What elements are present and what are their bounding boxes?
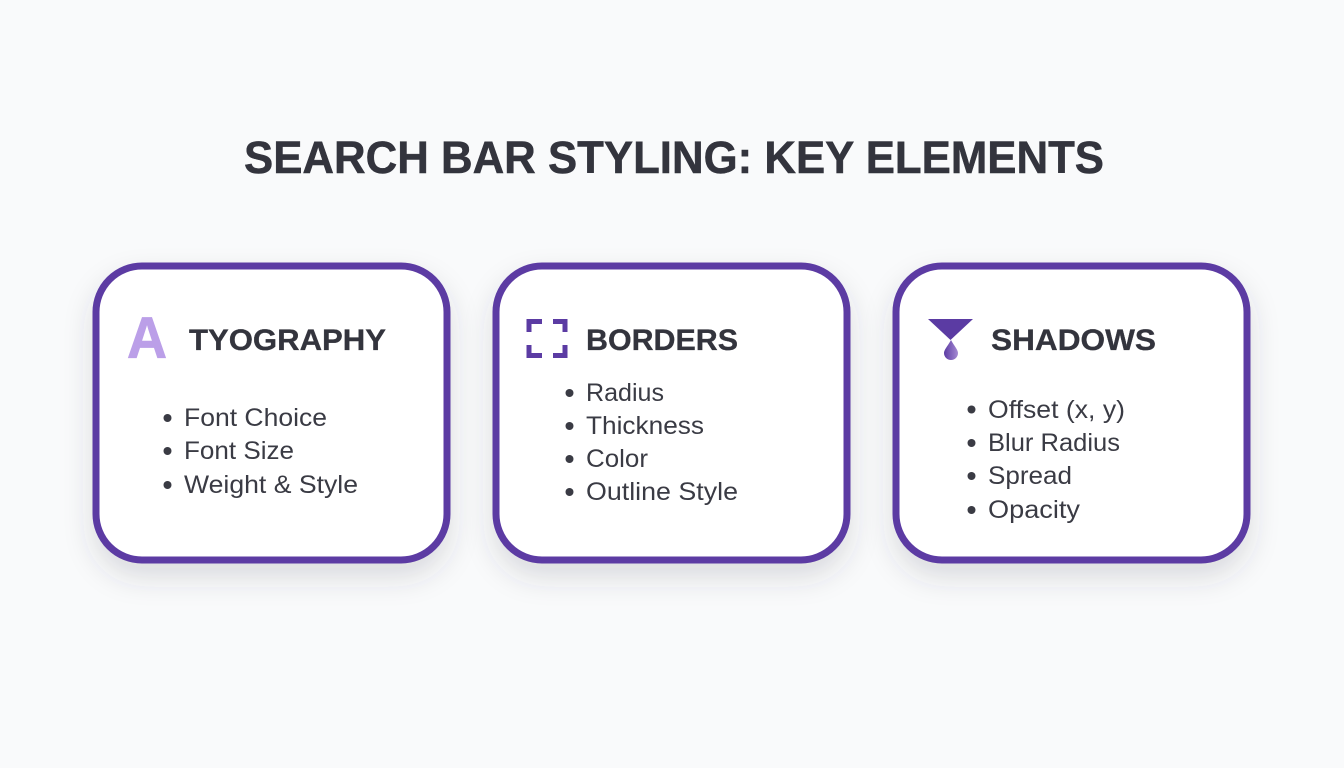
list: typography: [164, 404, 358, 499]
icon: funnel and drop: [928, 319, 973, 360]
panel: borders: [496, 266, 847, 560]
list: shadows: [968, 396, 1125, 524]
list: typography: Weight & Style: [184, 471, 358, 499]
list: typography: Font Choice: [184, 404, 327, 432]
icon: letter A: A: [127, 306, 167, 371]
list: borders: [566, 379, 738, 506]
icon: corner brackets: [529, 322, 565, 356]
list: shadows: Blur Radius: [988, 429, 1120, 457]
heading: borders: BORDERS: [586, 324, 738, 357]
panel: shadows: [896, 266, 1247, 560]
list: borders: Thickness: [586, 412, 704, 440]
list: shadows: Spread: [988, 462, 1072, 490]
list: typography: Font Size: [184, 437, 294, 465]
panel: typography: [96, 266, 447, 560]
list: borders: Outline Style: [586, 478, 738, 506]
list: shadows: Offset (x, y): [988, 396, 1125, 424]
list: borders: Color: [586, 445, 648, 473]
title: SEARCH BAR STYLING: KEY ELEMENTS: [244, 132, 1104, 183]
card: typography: [96, 266, 447, 560]
list: shadows: Opacity: [988, 496, 1081, 524]
card: shadows: [896, 266, 1247, 560]
list: borders: Radius: [586, 379, 664, 407]
card: borders: [496, 266, 847, 560]
heading: typography: TYOGRAPHY: [189, 324, 386, 357]
heading: shadows: SHADOWS: [991, 324, 1156, 357]
